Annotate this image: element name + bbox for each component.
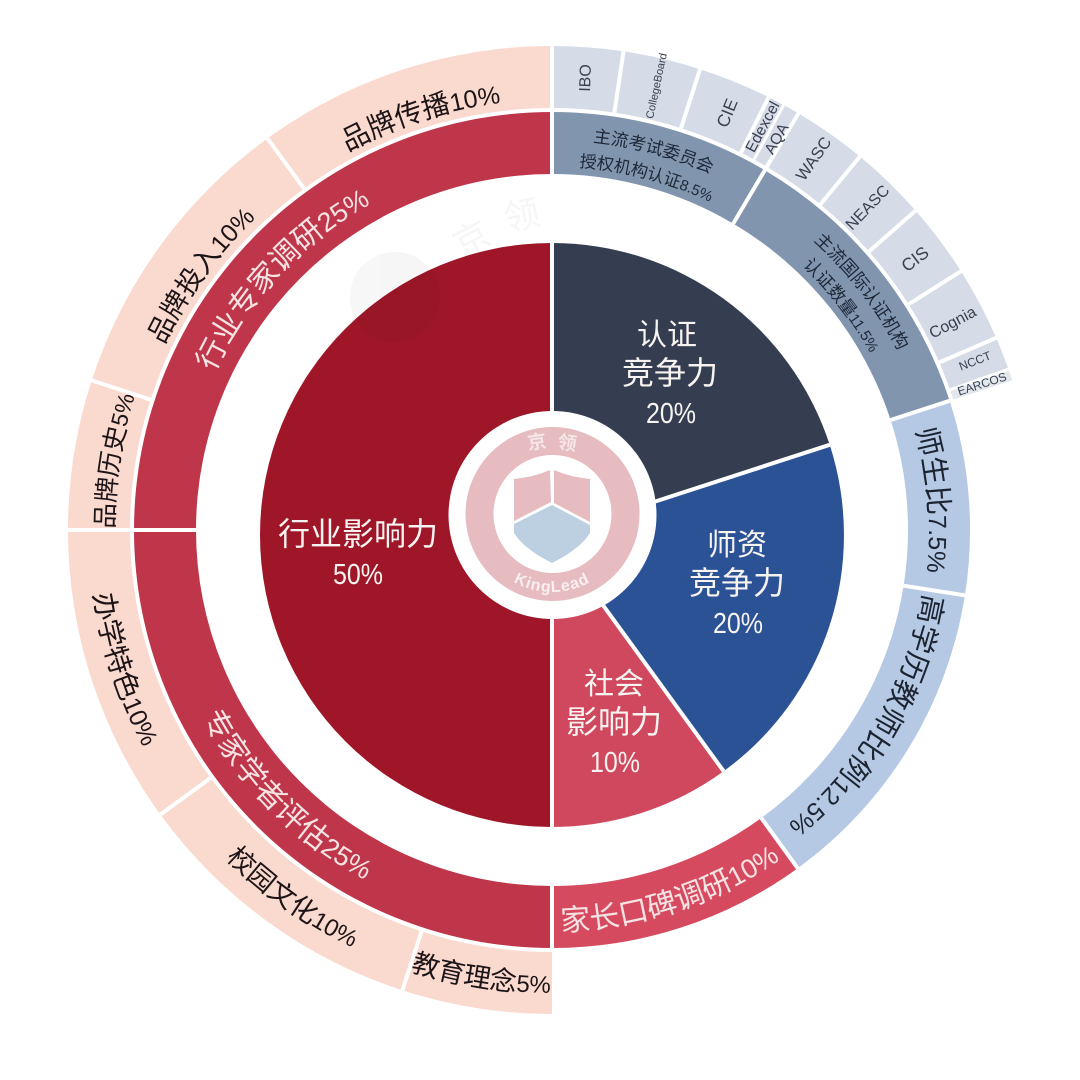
segment: CIS: CIS	[897, 242, 933, 276]
pie slice: 师资竞争力 20%: 师资	[707, 529, 767, 562]
segment: WASC	[767, 113, 860, 204]
pie slice: 行业影响力 50%	[260, 243, 552, 827]
panel: center pie chart	[260, 243, 844, 827]
segment: 办学特色 10%	[68, 532, 210, 814]
panel: outer ring, pink brand segments	[68, 46, 552, 1014]
pie slice: 认证竞争力 20%: 竞争力	[622, 355, 718, 391]
segment: 高学历教师比例 12.5%: 高学历教师比例12.5%	[790, 596, 945, 835]
panel: middle ring	[134, 78, 984, 974]
segment: 主流考试委员会授权机构认证 8.5%	[554, 112, 765, 224]
segment: Cognia: Cognia	[927, 304, 979, 342]
segment: 专家学者评估 25%: 专家学者评估25%	[208, 710, 370, 878]
icon: shield	[514, 470, 590, 563]
pie slice: 社会影响力 10%	[552, 535, 724, 827]
segment: CIE: CIE	[712, 96, 742, 130]
segment: 品牌投入 10%: 品牌投入10%	[147, 209, 254, 344]
segment: 家长口碑调研 10%	[554, 818, 798, 948]
segment: IBO: IBO	[577, 64, 595, 92]
logo text: KingLead: KingLead	[514, 572, 589, 596]
segment: 校园文化 10%	[161, 778, 422, 990]
pie slice: 社会影响力 10%: 10%	[590, 747, 640, 779]
segment: 品牌历史 5%	[68, 382, 150, 528]
pie slice: 社会影响力 10%: 社会	[584, 668, 644, 701]
segment: Cognia	[909, 271, 996, 362]
logo text: 领: 领	[556, 431, 578, 456]
pie slice: 行业影响力 50%: 50%	[333, 559, 383, 591]
segment: 师生比 7.5%: 师生比 7.5%	[914, 428, 952, 572]
segment: 主流考试委员会授权机构认证 8.5%: 主流考试委员会	[594, 128, 714, 174]
pie slice: 师资竞争力 20%: 20%	[713, 608, 763, 640]
pie slice: 认证竞争力 20%: 20%	[646, 398, 696, 430]
segment: 行业专家调研 25%	[134, 112, 551, 528]
segment: 品牌传播 10%	[268, 46, 550, 188]
segment: CIE	[681, 69, 769, 153]
segment: WASC: WASC	[793, 134, 835, 184]
pie slice: 师资竞争力 20%	[552, 445, 844, 771]
segment: Edexcel slice	[741, 97, 784, 160]
segment: 教育理念 5%	[402, 932, 552, 1014]
segment: 主流国际认证机构认证数量 11.5%	[733, 170, 950, 420]
center logo badge	[448, 411, 656, 619]
pie slice: 社会影响力 10%: 影响力	[566, 704, 662, 740]
watermark: faint seal: 京	[446, 213, 497, 266]
label: EARCOS: EARCOS	[956, 370, 1008, 398]
segment: CollegeBoard	[614, 51, 700, 128]
pie slice: 认证竞争力 20%	[552, 243, 830, 535]
segment: 师生比 7.5%	[890, 401, 970, 594]
segment: 品牌历史 5%: 品牌历史5%	[94, 394, 134, 527]
segment: NCCT	[939, 338, 1008, 390]
segment: 校园文化 10%: 校园文化10%	[228, 845, 356, 946]
segment: 主流国际认证机构认证数量 11.5%: 主流国际认证机构	[814, 234, 908, 350]
watermark: faint seal: 领	[500, 192, 544, 239]
pie slice: 认证竞争力 20%: 认证	[637, 319, 697, 352]
segment: 主流考试委员会授权机构认证 8.5%: 授权机构认证8.5%	[580, 153, 712, 201]
segment: NEASC: NEASC	[843, 182, 893, 234]
segment: 家长口碑调研 10%: 家长口碑调研10%	[562, 846, 778, 933]
segment: 主流国际认证机构认证数量 11.5%: 认证数量11.5%	[804, 258, 878, 352]
segment: NEASC	[820, 156, 916, 252]
segment: 行业专家调研 25%: 行业专家调研25%	[195, 190, 368, 368]
watermark: faint seal	[350, 192, 544, 342]
segment: 专家学者评估 25%	[134, 531, 551, 948]
segment: NCCT: NCCT	[957, 348, 994, 374]
segment: 品牌传播 10%: 品牌传播10%	[343, 86, 500, 152]
segment: 教育理念 5%: 教育理念5%	[412, 950, 550, 993]
logo text: 京: 京	[526, 429, 548, 455]
pie slice: 行业影响力 50%: 行业影响力	[278, 516, 438, 552]
segment: IBO	[552, 46, 624, 113]
segment: 品牌投入 10%	[92, 138, 304, 400]
label: AQA: AQA	[761, 120, 793, 157]
pie slice: 师资竞争力 20%: 竞争力	[689, 565, 785, 601]
segment: 办学特色 10%: 办学特色10%	[92, 593, 157, 746]
segment: EARCOS slice	[950, 369, 1012, 400]
segment: CIS	[869, 211, 961, 304]
panel: outer ring, accreditation bodies	[552, 46, 1012, 400]
label: Edexcel: Edexcel	[743, 99, 783, 155]
segment: AQA slice	[754, 105, 798, 167]
segment: CollegeBoard: CollegeBoard	[644, 52, 670, 120]
